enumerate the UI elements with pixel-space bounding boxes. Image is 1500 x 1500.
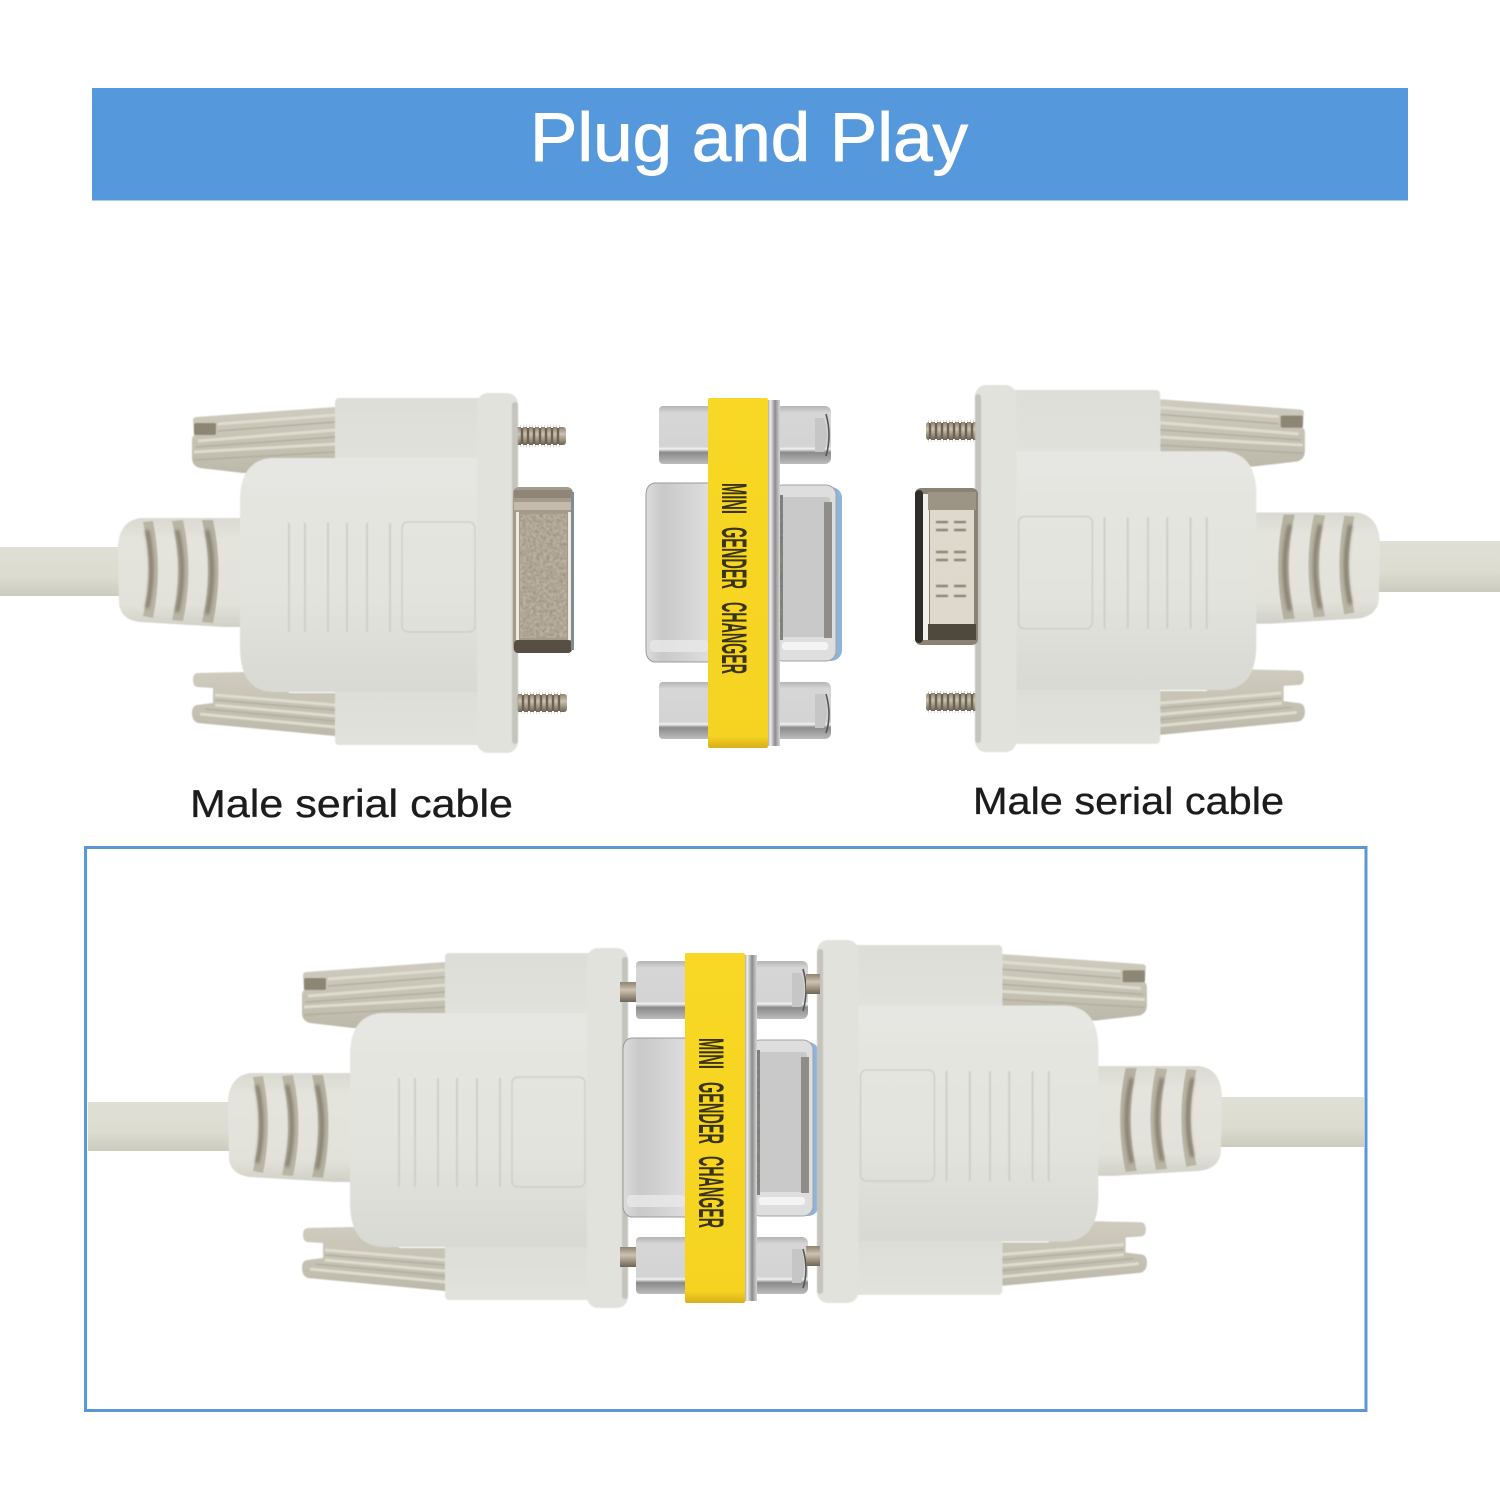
band text: MINI (714, 483, 753, 514)
bottom yellow band (685, 953, 745, 1303)
title banner: Plug and Play (530, 99, 969, 176)
top right cable label: Male serial cable (973, 781, 1284, 823)
top left cable label: Male serial cable (190, 783, 513, 826)
bottom adapter: CHANGER (691, 1156, 730, 1228)
top right male serial cable (915, 385, 1500, 752)
gender changer adapter, separate: CHANGER (714, 602, 753, 674)
title banner (92, 88, 1408, 200)
band text: GENDER (714, 527, 753, 589)
bottom adapter (623, 953, 819, 1303)
bottom band text: MINI (691, 1038, 730, 1069)
bottom right cable (806, 940, 1364, 1303)
bottom left cable (88, 948, 636, 1308)
top left male serial cable (0, 393, 574, 753)
bottom band text: GENDER (691, 1082, 730, 1144)
yellow label band (708, 398, 768, 748)
gender changer adapter, separate (646, 398, 842, 748)
connected assembly panel (86, 848, 1366, 1410)
